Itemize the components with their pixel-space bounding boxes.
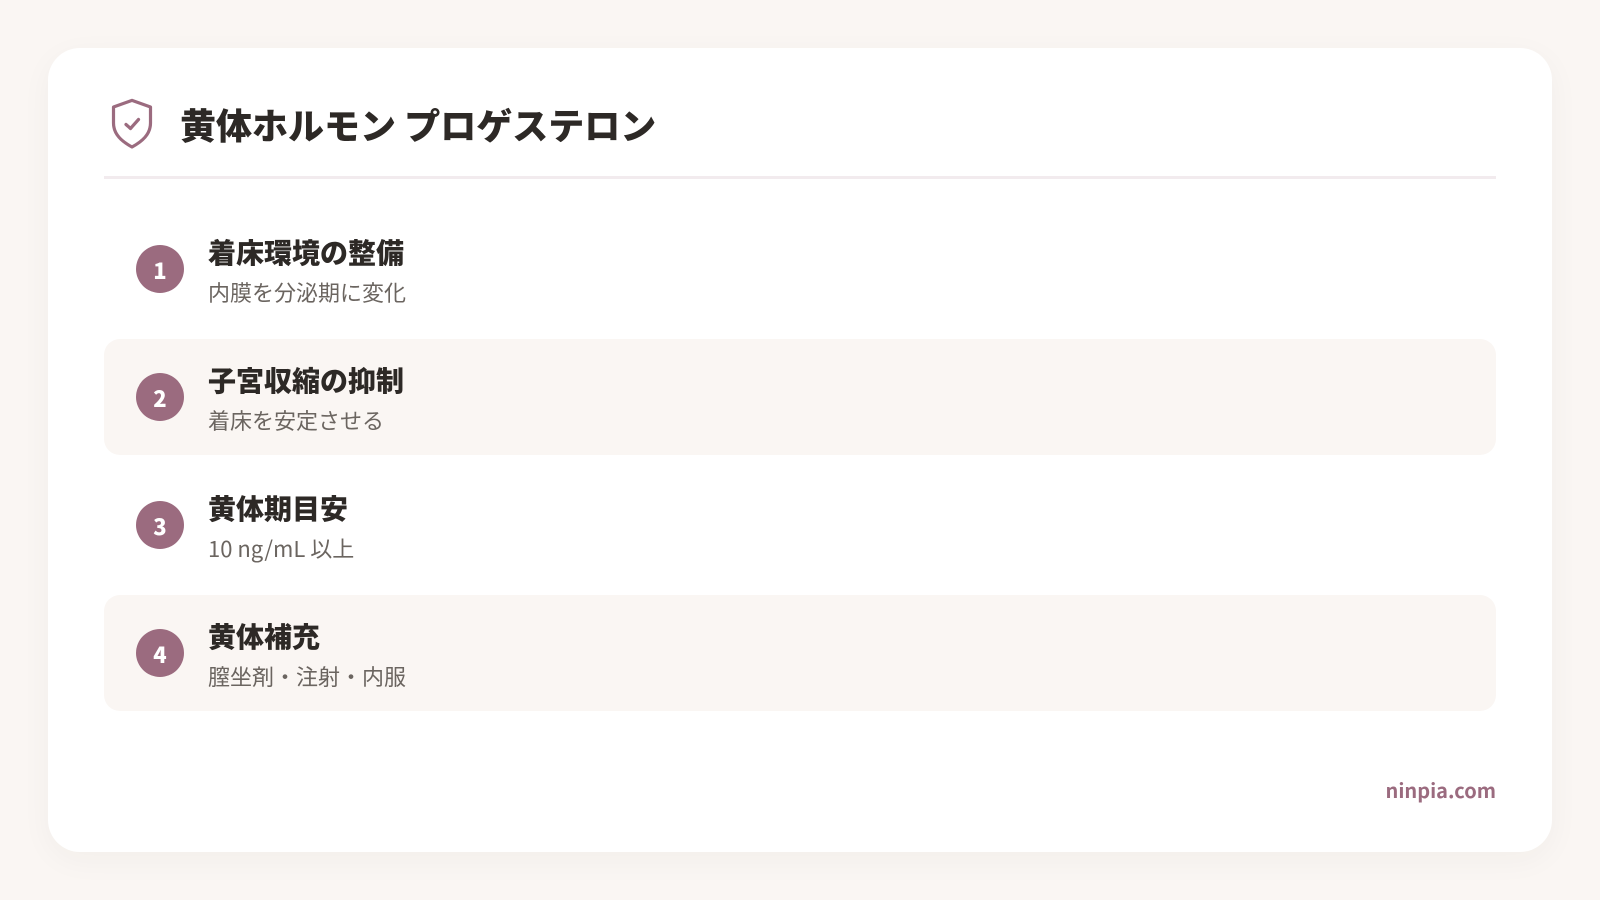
item 4 description: 膣坐剤・注射・内服 [208, 660, 406, 692]
item 1 description: 内膜を分泌期に変化 [208, 276, 406, 308]
number badge 4: 4 [153, 638, 167, 670]
number badge 3 [136, 501, 184, 549]
footer source: ninpia.com [1386, 775, 1496, 804]
number badge 1 [136, 245, 184, 293]
item 2: uterine contraction suppression [104, 339, 1496, 455]
item 3 heading: 黄体期目安 [208, 488, 348, 528]
item 1: implantation environment [136, 232, 406, 308]
number badge 2: 2 [153, 382, 167, 414]
item 2 description: 着床を安定させる [208, 404, 384, 436]
item 2 heading: 子宮収縮の抑制 [208, 360, 404, 400]
item 4: luteal support [104, 595, 1496, 711]
item 4 heading: 黄体補充 [208, 616, 320, 656]
item 3: luteal phase guideline [136, 488, 354, 564]
item 1 heading: 着床環境の整備 [208, 232, 404, 272]
icon: shield with check [112, 98, 152, 149]
number badge 2 [136, 373, 184, 421]
number badge 4 [136, 629, 184, 677]
number badge 3: 3 [153, 510, 167, 542]
item 3 description: 10 ng/mL 以上 [208, 532, 354, 564]
number badge 1: 1 [153, 254, 167, 286]
title: 黄体ホルモン プロゲステロン [180, 98, 656, 150]
